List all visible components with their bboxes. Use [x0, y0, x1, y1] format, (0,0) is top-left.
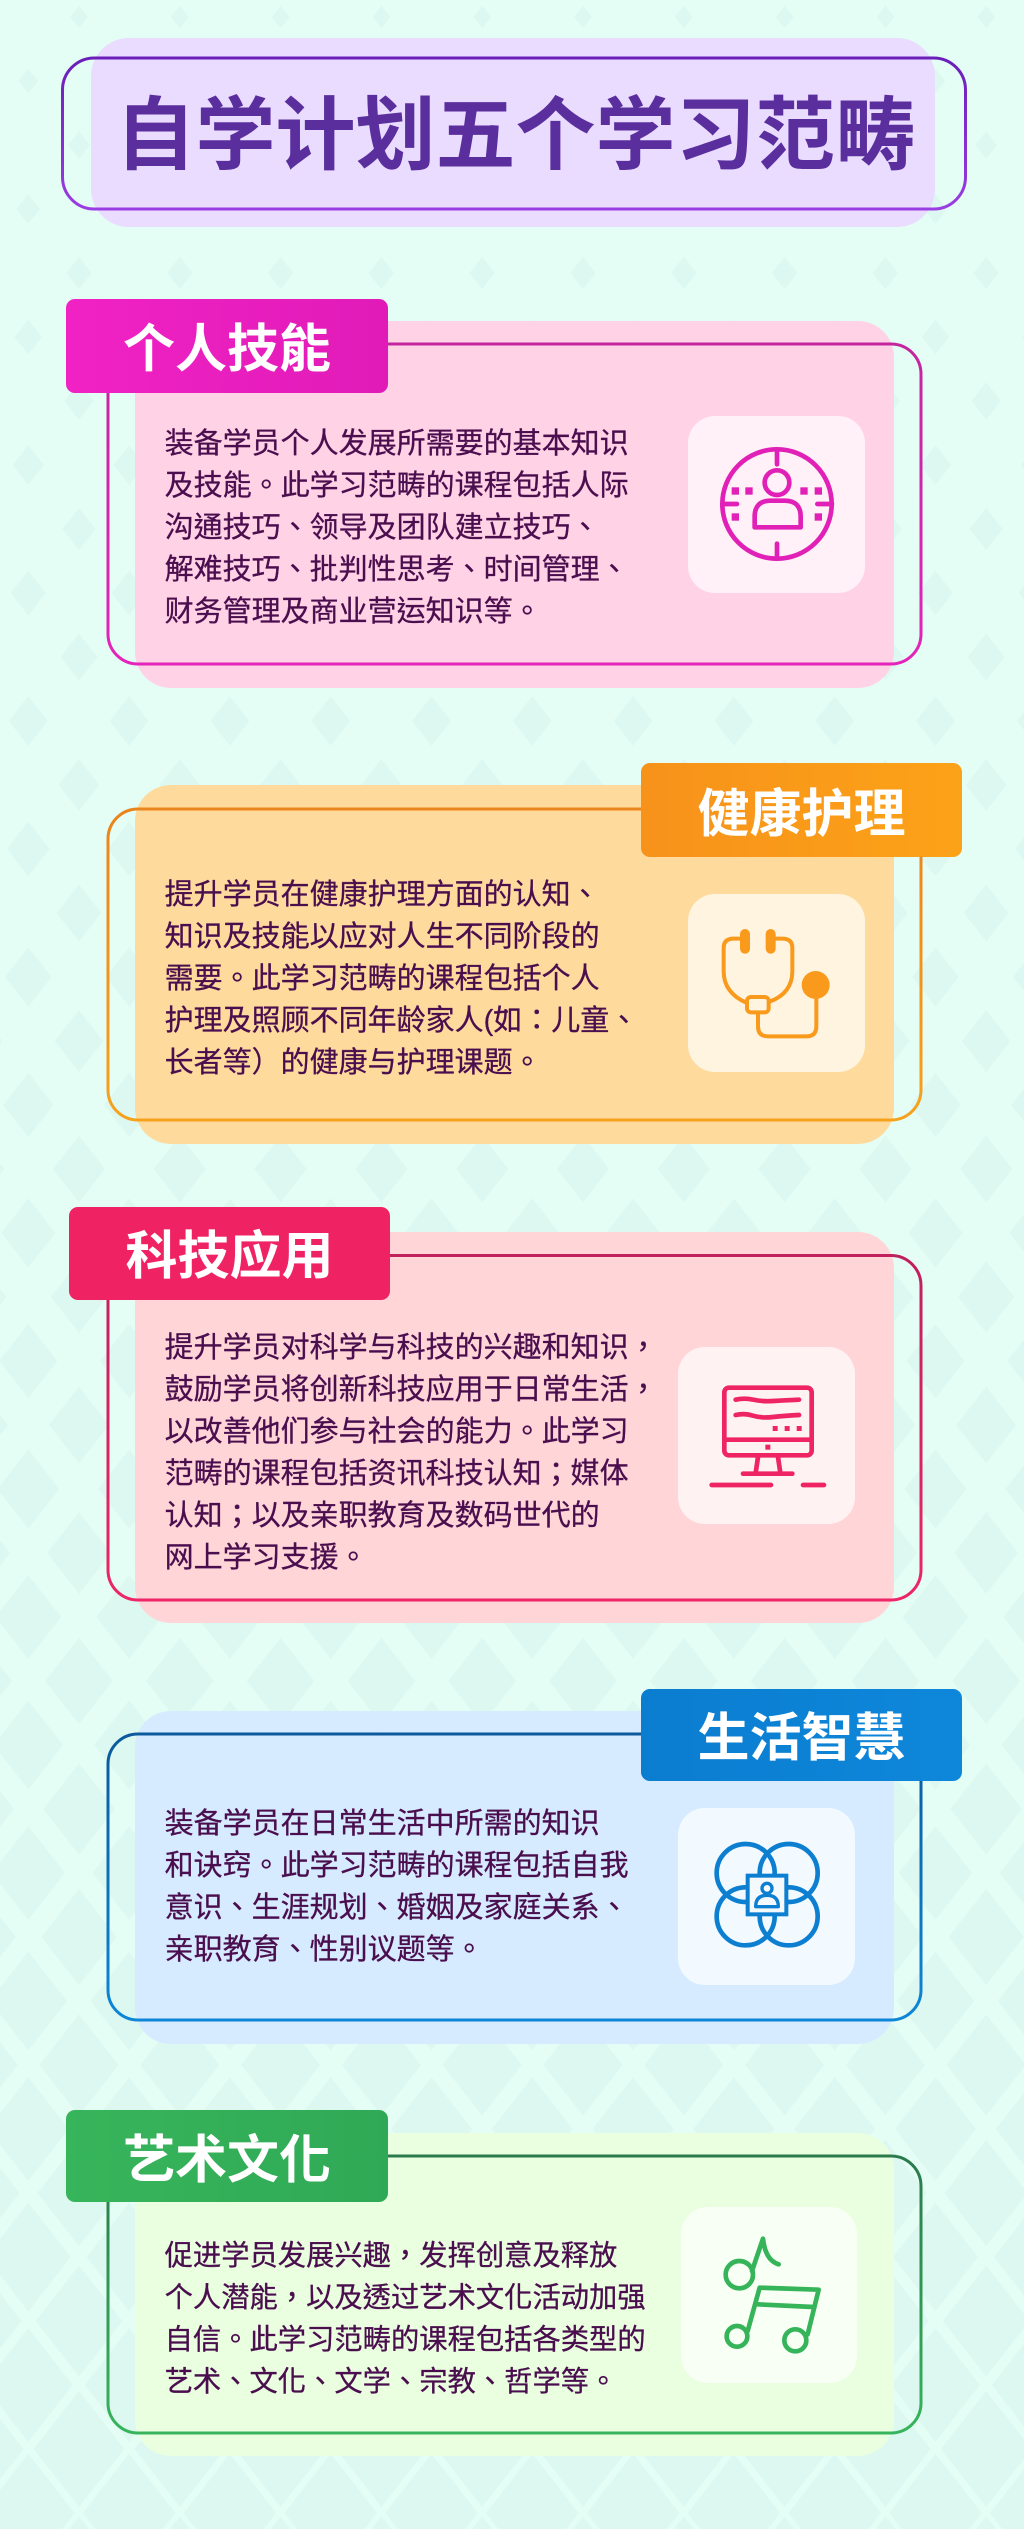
text block: technology: 以改善他们参与社会的能力。此学习 — [165, 1416, 629, 1448]
text block: health care: 长者等）的健康与护理课题。 — [165, 1046, 542, 1078]
heading: personal skills: 个人技能 — [123, 321, 331, 379]
text block: personal skills: 财务管理及商业营运知识等。 — [165, 596, 542, 628]
heading: health care — [641, 763, 962, 857]
text block: arts and culture: 自信。此学习范畴的课程包括各类型的 — [165, 2322, 646, 2354]
text block: health care — [165, 878, 638, 1078]
heading: life wisdom — [641, 1689, 962, 1781]
icon: overlapping circles with person — [678, 1808, 855, 1985]
heading: health care: 健康护理 — [697, 786, 906, 844]
heading: life wisdom: 生活智慧 — [697, 1710, 906, 1768]
text block: health care: 提升学员在健康护理方面的认知、 — [165, 878, 600, 910]
heading: arts and culture — [66, 2110, 388, 2202]
text block: arts and culture — [165, 2238, 646, 2396]
text block: technology: 鼓励学员将创新科技应用于日常生活， — [165, 1374, 658, 1406]
text block: personal skills: 装备学员个人发展所需要的基本知识 — [165, 428, 629, 460]
text block: health care: 知识及技能以应对人生不同阶段的 — [165, 920, 600, 952]
panel: technology — [69, 1207, 922, 1623]
text block: technology: 提升学员对科学与科技的兴趣和知识， — [165, 1332, 658, 1364]
panel: health care — [106, 763, 962, 1144]
text block: life wisdom: 和诀窍。此学习范畴的课程包括自我 — [165, 1850, 629, 1882]
text block: arts and culture: 个人潜能，以及透过艺术文化活动加强 — [165, 2280, 646, 2312]
icon: music notes — [681, 2207, 857, 2383]
text block: life wisdom — [165, 1808, 629, 1966]
text block: personal skills: 解难技巧、批判性思考、时间管理、 — [165, 554, 629, 586]
text block: technology — [165, 1332, 658, 1574]
text block: personal skills: 沟通技巧、领导及团队建立技巧、 — [165, 512, 600, 544]
panel: life wisdom — [106, 1689, 962, 2044]
text block: life wisdom: 装备学员在日常生活中所需的知识 — [165, 1808, 600, 1840]
text block: personal skills: 及技能。此学习范畴的课程包括人际 — [165, 470, 629, 502]
heading: technology: 科技应用 — [125, 1228, 334, 1286]
icon: desktop computer — [678, 1347, 855, 1524]
text block: life wisdom: 意识、生涯规划、婚姻及家庭关系、 — [165, 1892, 629, 1924]
panel: personal skills — [66, 299, 922, 688]
text block: health care: 护理及照顾不同年龄家人(如：儿童、 — [165, 1004, 638, 1036]
heading: arts and culture: 艺术文化 — [123, 2132, 331, 2190]
text block: technology: 范畴的课程包括资讯科技认知；媒体 — [165, 1458, 629, 1490]
title: 自学计划五个学习范畴 — [116, 91, 916, 180]
panel: arts and culture — [66, 2110, 922, 2456]
heading: personal skills — [66, 299, 388, 393]
text block: technology: 认知；以及亲职教育及数码世代的 — [165, 1500, 600, 1532]
text block: life wisdom: 亲职教育、性别议题等。 — [165, 1934, 484, 1966]
text block: arts and culture: 促进学员发展兴趣，发挥创意及释放 — [165, 2238, 617, 2270]
text block: arts and culture: 艺术、文化、文学、宗教、哲学等。 — [165, 2364, 617, 2396]
icon: stethoscope — [688, 894, 865, 1072]
text block: personal skills — [165, 428, 629, 628]
text block: technology: 网上学习支援。 — [165, 1542, 368, 1574]
text block: health care: 需要。此学习范畴的课程包括个人 — [165, 962, 600, 994]
panel: title banner — [61, 38, 967, 227]
heading: technology — [69, 1207, 390, 1300]
icon: person in target — [688, 416, 865, 593]
